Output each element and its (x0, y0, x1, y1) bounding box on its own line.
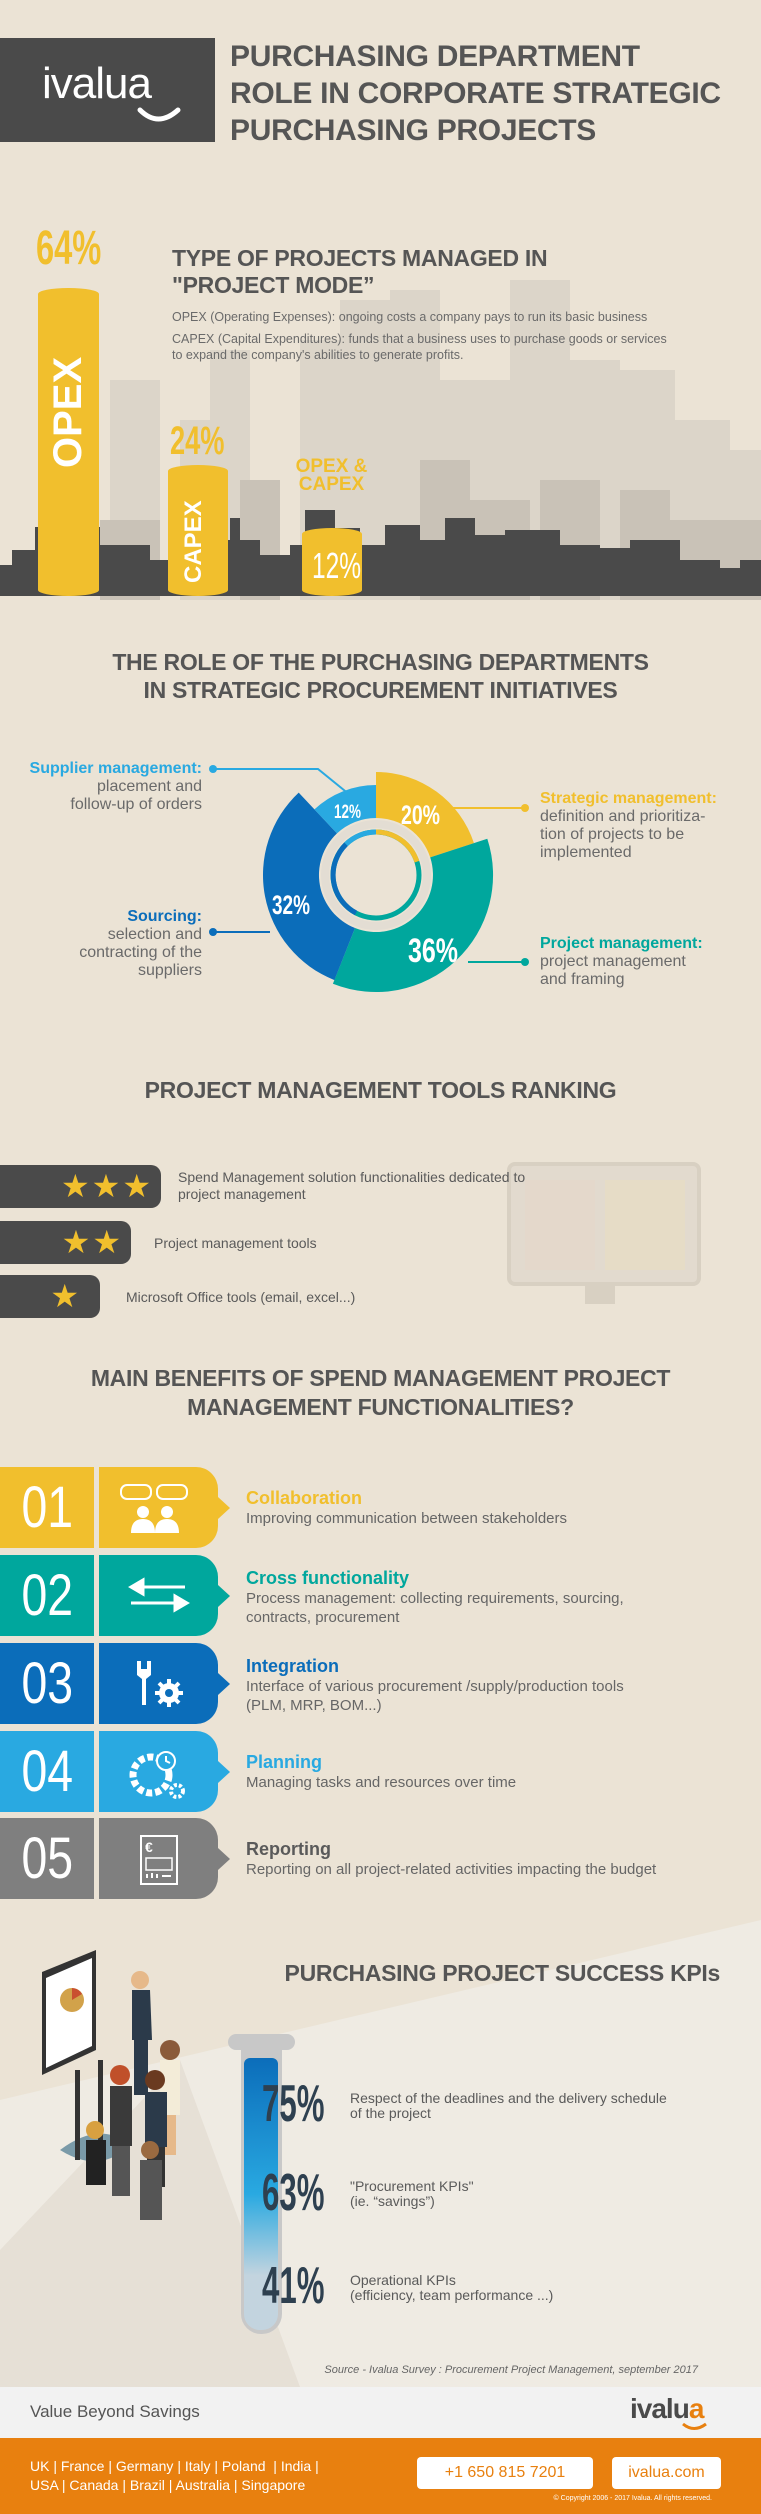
KPI 63%: 63% (262, 2164, 324, 2222)
ranking bar: 1 star: ★ (50, 1278, 81, 1314)
label OPEX & CAPEX (296, 456, 367, 495)
ranking bar: 2 stars (0, 1221, 131, 1264)
logo: ivalua: ivalua (42, 59, 151, 108)
footer logo: ivalua (630, 2393, 703, 2424)
benefit 03: integration: (PLM, MRP, BOM...) (246, 1697, 382, 1714)
footer orange band (0, 2438, 761, 2514)
thermometer tube (228, 2034, 295, 2334)
section heading: main benefits: MANAGEMENT FUNCTIONALITIES? (187, 1394, 574, 1420)
title (230, 40, 721, 147)
benefit 02: cross functionality (0, 1555, 624, 1636)
ranking bar: 3 stars (0, 1165, 161, 1208)
heading: KPIs: PURCHASING PROJECT SUCCESS KPIs (285, 1960, 720, 1986)
benefit 05: reporting: 05 (21, 1826, 73, 1891)
benefit 02: cross functionality: Process management: collecting requirements, sourcing, (246, 1590, 624, 1607)
icon: people talking (99, 1467, 218, 1548)
cylinder 12% (302, 528, 362, 596)
dark skyline ground (0, 510, 761, 596)
section heading: type of projects: TYPE OF PROJECTS MANAGED IN (172, 245, 547, 271)
copyright: © Copyright 2006 - 2017 Ivalua. All rights reserved. (554, 2495, 712, 2502)
benefit 02: cross functionality: 02 (21, 1563, 73, 1628)
background monitor decoration (507, 1162, 701, 1304)
benefit 02: cross functionality: contracts, procurement (246, 1609, 399, 1626)
section heading: role of purchasing (112, 649, 649, 703)
benefit 04: planning (0, 1731, 516, 1812)
countries: UK | France | Germany | Italy | Poland | India | (30, 2458, 319, 2474)
ranking text 1: Spend Management solution functionalities dedicated to (178, 1169, 525, 1185)
benefit 04: planning: 04 (21, 1739, 73, 1804)
section heading: main benefits (91, 1365, 670, 1420)
background skyline (0, 280, 761, 600)
benefit 05: reporting: Reporting on all project-related activities impacting the budget (246, 1861, 656, 1878)
benefit 01: collaboration: Collaboration (246, 1488, 362, 1508)
benefit 01: collaboration: Improving communication between stakeholders (246, 1510, 567, 1527)
ranking text 2: Project management tools (154, 1235, 317, 1251)
label: project management: Project management: (540, 935, 703, 952)
section heading: tools ranking: PROJECT MANAGEMENT TOOLS RANKING (145, 1077, 616, 1103)
benefit 05: reporting: Reporting (246, 1839, 331, 1859)
icon: report document: € (145, 1839, 153, 1855)
icon: arrows (99, 1555, 218, 1636)
cylinder CAPEX (168, 465, 228, 596)
benefit 01: collaboration (0, 1467, 567, 1548)
footer tagline band: Value Beyond Savings (30, 2402, 200, 2421)
label: strategic management: definition and prioritiza- (540, 808, 705, 825)
ranking text 1: project management (178, 1186, 306, 1202)
KPI 75%: 75% (262, 2075, 324, 2133)
ranking bar: 1 star (0, 1275, 100, 1318)
website button (612, 2457, 721, 2489)
label: strategic management: implemented (540, 844, 632, 861)
label: sourcing: Sourcing: (127, 908, 202, 925)
donut chart: 32% (272, 890, 310, 920)
cylinder OPEX: OPEX (46, 357, 90, 468)
phone button: +1 650 815 7201 (445, 2464, 565, 2481)
benefit 04: planning: Planning (246, 1752, 322, 1772)
KPI section light background (0, 1920, 761, 2387)
label: sourcing (79, 908, 202, 979)
label: project management: project management (540, 953, 686, 970)
benefit 03: integration: Interface of various procurement /supply/production tools (246, 1678, 624, 1695)
label: project management: and framing (540, 971, 624, 988)
cylinder OPEX (38, 288, 99, 596)
donut chart: 36% (408, 932, 458, 970)
benefit 03: integration (0, 1643, 624, 1724)
body: opex capex definitions: OPEX (Operating Expenses): ongoing costs a company pays to run its basic business CAPEX (Capital Expenditures): funds that a business uses to purchase goods or services to expand the company's abilities to generate profits. (172, 310, 667, 362)
donut chart (209, 765, 529, 992)
ranking bar: 2 stars: ★★ (62, 1224, 123, 1260)
section heading: role of purchasing: THE ROLE OF THE PURCHASING DEPARTMENTS (112, 649, 649, 675)
cylinder 12%: 12% (312, 545, 361, 586)
section heading: role of purchasing: IN STRATEGIC PROCUREMENT INITIATIVES (144, 677, 617, 703)
section heading: main benefits: MAIN BENEFITS OF SPEND MANAGEMENT PROJECT (91, 1365, 670, 1391)
ranking bar: 3 stars: ★★★ (61, 1168, 153, 1204)
section heading: type of projects: "PROJECT MODE” (172, 272, 374, 298)
label: strategic management: Strategic management: (540, 790, 717, 807)
header logo box (0, 38, 215, 142)
label: strategic management: tion of projects to be (540, 826, 684, 843)
ranking text 3: Microsoft Office tools (email, excel...) (126, 1289, 355, 1305)
donut chart: 20% (401, 800, 440, 830)
value 64%: 64% (36, 222, 101, 275)
title: ROLE IN CORPORATE STRATEGIC (230, 77, 721, 110)
donut chart: 12% (334, 802, 361, 823)
bar chart: cylinders (36, 222, 367, 596)
benefit 04: planning: Managing tasks and resources over time (246, 1774, 516, 1791)
text: of the project (350, 2105, 431, 2121)
label: sourcing: contracting of the (79, 944, 202, 961)
benefit 05: reporting (0, 1818, 656, 1899)
label: supplier management (30, 760, 202, 813)
title: PURCHASING PROJECTS (230, 114, 596, 147)
illustration: presenter and audience (42, 1950, 180, 2220)
cylinder CAPEX: CAPEX (180, 500, 207, 583)
footer tagline band (0, 2387, 761, 2438)
icon: tools (99, 1643, 218, 1724)
label: sourcing: selection and (108, 926, 202, 943)
title: PURCHASING DEPARTMENT (230, 40, 640, 73)
text: Operational KPIs (350, 2272, 456, 2288)
ranking text 1 (178, 1169, 525, 1202)
section heading: type of projects (172, 245, 547, 298)
value 24%: 24% (170, 419, 224, 463)
label OPEX & CAPEX: OPEX & (296, 456, 367, 477)
icon: report document (99, 1818, 218, 1899)
label: project management (540, 935, 703, 988)
source note: Source - Ivalua Survey : Procurement Project Management, september 2017 (324, 2364, 698, 2376)
countries: USA | Canada | Brazil | Australia | Singapore (30, 2477, 305, 2493)
label: supplier management: placement and (97, 778, 202, 795)
countries (30, 2458, 319, 2493)
text: (ie. “savings”) (350, 2193, 435, 2209)
text: (efficiency, team performance ...) (350, 2287, 553, 2303)
benefit 03: integration: 03 (21, 1651, 73, 1716)
label: strategic management (540, 790, 717, 861)
benefit 01: collaboration: 01 (21, 1475, 73, 1540)
text: "Procurement KPIs" (350, 2178, 474, 2194)
label: sourcing: suppliers (138, 962, 202, 979)
benefit 03: integration: Integration (246, 1656, 339, 1676)
label: supplier management: Supplier management: (30, 760, 202, 777)
label OPEX & CAPEX: CAPEX (299, 474, 364, 495)
KPI 41%: 41% (262, 2257, 324, 2315)
benefit 02: cross functionality: Cross functionality (246, 1568, 409, 1588)
text: Respect of the deadlines and the delivery schedule (350, 2090, 667, 2106)
label: supplier management: follow-up of orders (70, 796, 202, 813)
icon: gear clock (99, 1731, 218, 1812)
phone button (417, 2457, 593, 2489)
website button: ivalua.com (628, 2464, 705, 2481)
